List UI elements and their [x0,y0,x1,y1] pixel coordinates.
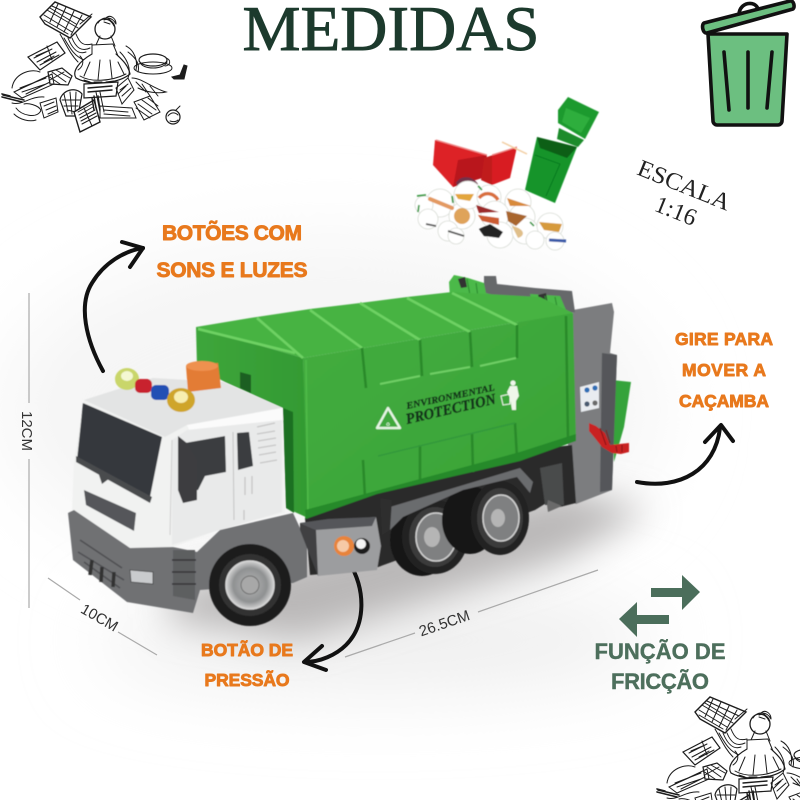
friction label: FRICÇÃO [611,669,709,694]
vehicle marking: PROTECTION [404,391,499,428]
rear bucket behind [612,380,631,462]
dimension: length: 26.5CM [417,607,472,640]
roof lights [115,361,221,412]
side box with button [300,517,381,576]
side grooves [362,316,568,498]
friction label: FUNÇÃO DE [594,639,726,664]
rear wheels [390,481,529,576]
callout: buttons with sounds and lights: SONS E LUZES [156,259,308,282]
crank [589,423,629,454]
vehicle marking: ENVIRONMENTAL [404,383,496,412]
rear panel [566,303,617,504]
windshield [77,403,162,497]
mirror [178,436,197,503]
side lower shade [305,434,576,519]
toy bins and picture discs [415,97,599,250]
icon: green trash can [703,1,794,125]
rear fender [380,468,533,535]
icon: garbage doodle bottom right [657,697,800,800]
side windows [180,436,226,492]
top ridges [198,293,517,358]
callout: turn to move bucket: MOVER A [682,360,766,380]
vehicle marking [377,380,519,428]
callout: push button: PRESSÃO [204,669,290,690]
discs [415,181,564,250]
front wheel [209,544,291,626]
dimension: height: 12CM [18,411,35,451]
red bin [433,140,527,190]
callout: turn to move bucket [675,329,773,411]
bumper and chassis [68,510,307,613]
scale label: ESCALA [634,156,735,217]
icon: garbage doodle top left [2,2,187,132]
underbody dark [305,445,576,575]
callout: push button: BOTÃO DE [201,639,293,660]
callout: turn to move bucket: GIRE PARA [675,329,773,349]
scale label: 1:16 [651,192,700,232]
vehicle marking: ♻ [386,422,391,428]
friction arrows [619,575,700,637]
dimension: length [345,570,598,657]
green bin [525,97,599,203]
arrow: to push button callout [304,562,361,670]
hinges [449,275,575,330]
grille [84,490,136,531]
cab [72,378,285,550]
dimension: width: 10CM [78,601,121,635]
callout: buttons with sounds and lights [156,221,308,282]
arrow: to bucket callout [637,425,733,484]
truck [68,275,631,626]
callout: buttons with sounds and lights: BOTÕES COM [162,221,302,245]
callout: push button [201,639,293,690]
cargo body [196,292,576,519]
arrow: to lights callout [85,242,143,371]
friction label [594,639,726,694]
scale label [623,156,735,242]
vents [244,423,277,520]
dimension: width [48,578,157,655]
callout: turn to move bucket: CAÇAMBA [679,391,769,411]
